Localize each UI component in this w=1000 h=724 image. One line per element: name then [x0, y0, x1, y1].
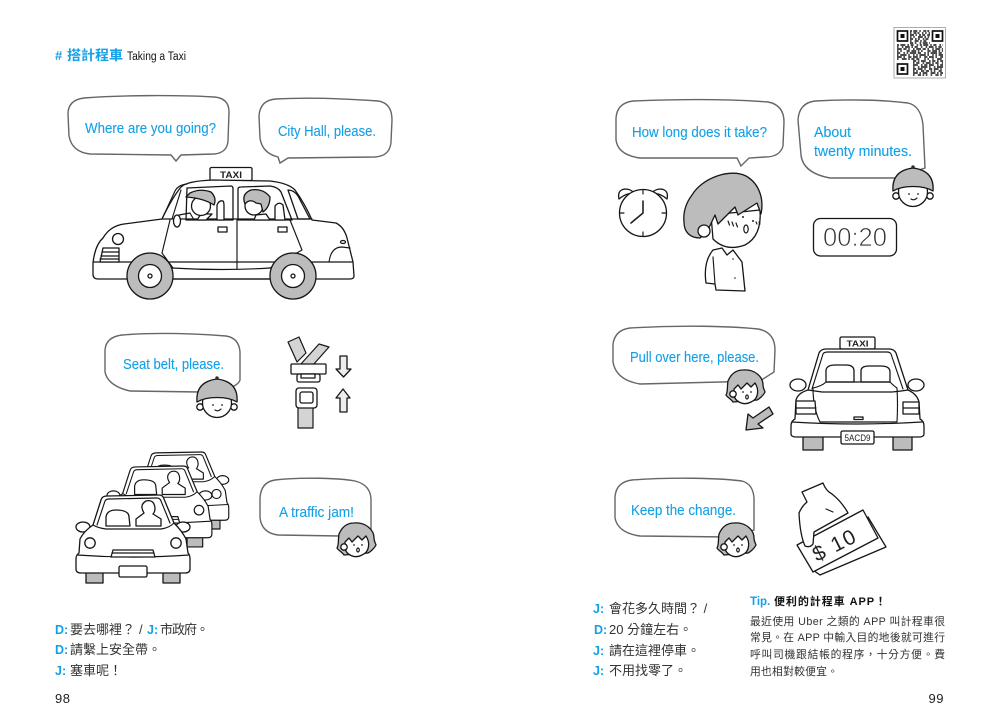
title: section heading: # — [55, 48, 63, 63]
illustration: taxi rear view — [790, 337, 924, 450]
line 2: D: — [55, 643, 68, 657]
character head: driver — [197, 377, 237, 418]
line 1: 會花多久時間？ / — [609, 601, 708, 616]
line 3: 塞車呢！ — [70, 663, 122, 678]
illustration: taxi rear view: 5ACD9 — [844, 433, 870, 443]
tip body — [750, 614, 945, 678]
tip body: 最近使用 Uber 之類的 APP 叫計程車很 — [750, 614, 945, 628]
icon: up arrow — [336, 389, 350, 412]
speech bubble: Pull over: Pull over here, please. — [630, 349, 759, 366]
panel: seat belt — [105, 333, 351, 428]
speech bubble: A traffic jam: A traffic jam! — [279, 504, 354, 521]
line 1 — [55, 622, 209, 637]
speech bubble: A traffic jam — [260, 478, 371, 536]
speech bubble: Where are you going — [68, 96, 229, 161]
character head: passenger — [337, 523, 376, 557]
line 1: / — [139, 622, 143, 637]
illustration: three cars in line — [76, 452, 229, 583]
line 3: J: — [593, 644, 604, 658]
speech bubble: About twenty minutes — [798, 100, 925, 178]
panel: how long — [616, 100, 933, 291]
line 2: 請繫上安全帶。 — [70, 642, 161, 657]
speech bubble: Seat belt: Seat belt, please. — [123, 356, 224, 373]
title: section heading: 搭計程車 — [67, 47, 123, 63]
panel: where are you going — [68, 96, 392, 299]
tip body: 呼叫司機跟結帳的程序，十分方便。費 — [750, 647, 945, 661]
line 1: J: — [147, 623, 158, 637]
tip body: 常見。在 APP 中輸入目的地後就可進行 — [750, 630, 945, 644]
icon: seat belt buckle — [288, 337, 329, 428]
dialogue: right page — [593, 601, 708, 678]
line 1: 市政府。 — [160, 622, 209, 637]
speech bubble: Seat belt — [105, 333, 240, 392]
wheels — [127, 253, 316, 299]
speech bubble: City Hall: City Hall, please. — [278, 123, 376, 140]
illustration: taxi rear view: TAXI — [846, 338, 868, 348]
line 2: 20 分鐘左右。 — [609, 622, 692, 637]
tip heading: 便利的計程車 APP！ — [774, 594, 886, 608]
line 4: 不用找零了。 — [609, 663, 687, 678]
speech bubble: About twenty minutes: twenty minutes. — [814, 143, 912, 160]
icon: digital timer: 00:20 — [823, 222, 887, 252]
line 1: D: — [55, 623, 68, 637]
driver — [174, 190, 224, 227]
illustration: hand giving a ten-dollar bill: $ 10 — [809, 525, 861, 566]
speech bubble: Keep the change — [615, 478, 754, 537]
title: section heading — [55, 47, 186, 63]
speech bubble: Where are you going: Where are you going? — [85, 120, 216, 137]
title: section heading: Taking a Taxi — [127, 51, 186, 63]
speech bubble: City Hall — [259, 98, 392, 163]
speech bubble: How long — [616, 100, 784, 166]
character head: passenger — [717, 523, 756, 557]
illustration: hand giving a ten-dollar bill — [797, 483, 886, 575]
panel: traffic jam — [76, 452, 376, 583]
panel: pull over — [613, 326, 924, 450]
line 1: 要去哪裡？ — [70, 622, 135, 637]
illustration: taxi side view: TAXI — [220, 170, 242, 180]
icon: digital timer — [814, 218, 896, 256]
icon: arrow pointing to the curb — [746, 407, 773, 430]
tip heading: Tip. — [750, 596, 770, 608]
tip box — [750, 594, 945, 678]
speech bubble: Keep the change: Keep the change. — [631, 502, 736, 519]
line 4: J: — [593, 664, 604, 678]
panel: keep the change — [615, 478, 886, 575]
character head: driver — [893, 166, 933, 206]
icon: alarm clock — [619, 189, 667, 236]
speech bubble: Pull over — [613, 326, 775, 384]
icon: down arrow — [336, 356, 351, 377]
line 2: D: — [594, 623, 607, 637]
speech bubble: How long: How long does it take? — [632, 124, 767, 141]
dialogue: left page — [55, 622, 209, 678]
character head: passenger — [726, 370, 765, 404]
speech bubble: About twenty minutes: About — [814, 124, 852, 141]
line 3: J: — [55, 664, 66, 678]
tip body: 用也相對較便宜。 — [750, 664, 838, 678]
line 3: 請在這裡停車。 — [609, 643, 700, 658]
character: large passenger portrait — [684, 173, 762, 291]
illustration: taxi side view — [93, 168, 354, 299]
passenger — [244, 190, 285, 220]
page number 99: 99 — [929, 691, 944, 706]
line 1: J: — [593, 602, 604, 616]
page number 98: 98 — [55, 691, 70, 706]
QR code — [894, 28, 946, 78]
